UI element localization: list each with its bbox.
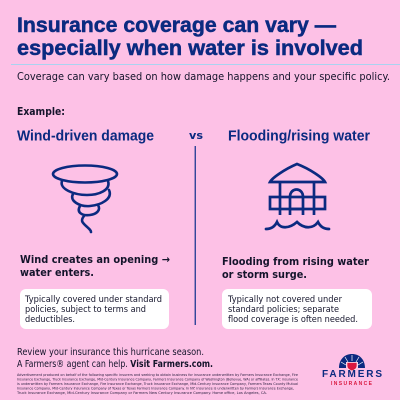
- legal fine print: Insurance Exchange, Truck Insurance Exchange, Mid-Century Insurance Company, Farmers Insurance Company of Washington (Bellevue, WA) or affiliates. In TX: insurance: [17, 378, 298, 382]
- footer call to action: A Farmers® agent can help. Visit Farmers.com.: [17, 359, 213, 370]
- callout: flood coverage: standard policies; separate: [228, 305, 339, 315]
- logo: Farmers Insurance: INSURANCE: [331, 381, 373, 387]
- subtitle: Coverage can vary based on how damage happens and your specific policy.: [17, 71, 390, 83]
- callout: flood coverage: Typically not covered under: [227, 295, 342, 305]
- flooding statement: [222, 255, 370, 281]
- callout: wind coverage: policies, subject to terms and: [25, 305, 146, 315]
- wind statement: [20, 253, 170, 279]
- callout: flood coverage: [222, 289, 372, 329]
- legal fine print: Insurance Company, Mid-Century Insurance Company of Texas or Texas Farmers Insurance Company. In NY: insurance is underwritten by Farmers Insurance Exchange,: [17, 386, 294, 390]
- legal fine print: [16, 373, 298, 395]
- flooding statement: or storm surge.: [222, 268, 307, 281]
- title: [17, 13, 363, 60]
- callout: wind coverage: Typically covered under standard: [24, 295, 162, 305]
- callout: flood coverage: flood coverage is often needed.: [228, 315, 358, 325]
- wind statement: water enters.: [20, 266, 94, 279]
- heading: flooding: Flooding/rising water: [228, 128, 370, 144]
- legal fine print: Advertisement produced on behalf of the following specific insurers and seeking to obtain business for insurance underwritten by Farmers Insurance Exchange, Fire: [17, 373, 298, 377]
- footer call to action: Review your insurance this hurricane season.: [17, 347, 204, 358]
- wind statement: Wind creates an opening →: [20, 253, 170, 266]
- footer call to action: [17, 347, 213, 370]
- icon: flooded house: [266, 164, 329, 229]
- legal fine print: Truck Insurance Exchange, Mid-Century Insurance Company or Farmers New Century Insurance Company. Home office, Los Angeles, CA.: [16, 391, 267, 395]
- legal fine print: is underwritten by Farmers Insurance Exchange, Fire Insurance Exchange, Truck Insurance Exchange, Mid-Century Insurance Company, Farmers Texas County Mutual: [17, 382, 298, 386]
- flooding statement: Flooding from rising water: [222, 255, 370, 268]
- title: Insurance coverage can vary —: [17, 13, 336, 37]
- example label: Example:: [17, 106, 65, 118]
- heading: wind-driven damage: Wind-driven damage: [17, 128, 154, 144]
- vs label: vs: [189, 129, 203, 142]
- callout: wind coverage: deductibles.: [25, 315, 75, 325]
- icon: logo dome: [339, 354, 365, 371]
- title: especially when water is involved: [17, 36, 363, 60]
- logo: Farmers Insurance: FARMERS: [322, 369, 382, 380]
- logo: Farmers Insurance: [322, 354, 382, 387]
- callout: wind coverage: [20, 289, 169, 329]
- icon: tornado: [53, 166, 117, 232]
- center divider: [195, 146, 196, 325]
